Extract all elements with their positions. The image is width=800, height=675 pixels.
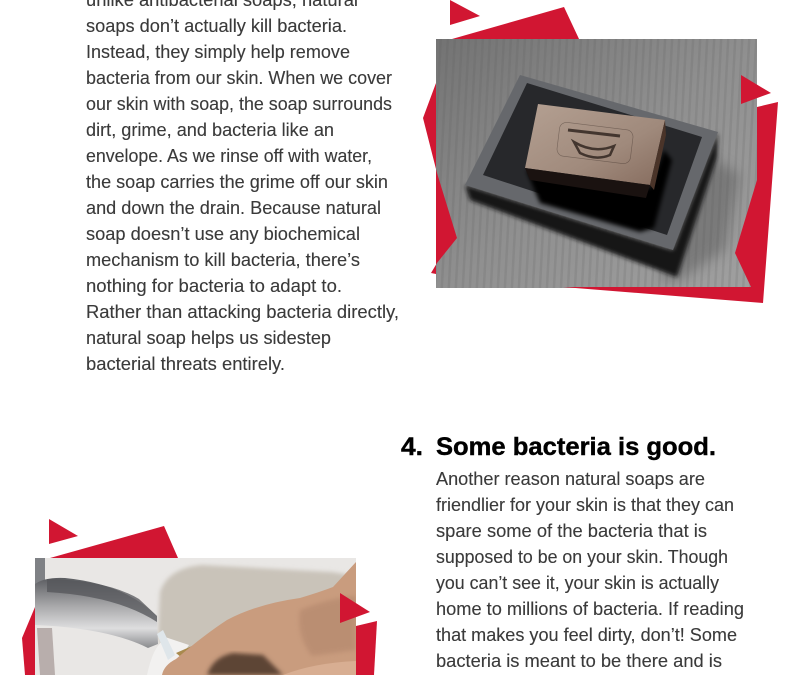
body text: natural soaps explanation: mechanism to kill bacteria, there’s	[86, 250, 360, 270]
body text: natural soaps explanation: soaps don’t actually kill bacteria.	[86, 16, 347, 36]
body text: skin bacteria explanation: home to millions of bacteria. If reading	[436, 599, 744, 619]
body text: skin bacteria explanation: spare some of the bacteria that is	[436, 521, 707, 541]
heading: Some bacteria is good: Some bacteria is good.	[436, 433, 716, 461]
body text: natural soaps explanation: the soap carries the grime off our skin	[86, 172, 388, 192]
red decorative frame: soap photo	[423, 0, 778, 303]
body text: natural soaps explanation: Rather than attacking bacteria directly,	[86, 302, 399, 322]
heading: Some bacteria is good: 4.	[401, 433, 423, 461]
red decorative frame: handwashing photo	[22, 519, 377, 675]
body text: natural soaps explanation: envelope. As we rinse off with water,	[86, 146, 372, 166]
photo: soap bar in dish	[436, 39, 757, 288]
body text: natural soaps explanation	[86, 0, 399, 374]
body text: natural soaps explanation: Instead, they simply help remove	[86, 42, 350, 62]
body text: skin bacteria explanation: that makes you feel dirty, don’t! Some	[436, 625, 737, 645]
body text: natural soaps explanation: nothing for bacteria to adapt to.	[86, 276, 342, 296]
body text: skin bacteria explanation: Another reason natural soaps are	[436, 469, 705, 489]
body text: skin bacteria explanation: friendlier for your skin is that they can	[436, 495, 734, 515]
body text: natural soaps explanation: dirt, grime, and bacteria like an	[86, 120, 334, 140]
body text: skin bacteria explanation: bacteria is meant to be there and is	[436, 651, 722, 671]
body text: natural soaps explanation: bacterial threats entirely.	[86, 354, 285, 374]
photo: hands under running faucet	[35, 558, 356, 675]
body text: skin bacteria explanation: you can’t see it, your skin is actually	[436, 573, 719, 593]
body text: natural soaps explanation: our skin with soap, the soap surrounds	[86, 94, 392, 114]
body text: skin bacteria explanation: supposed to be on your skin. Though	[436, 547, 728, 567]
body text: natural soaps explanation: natural soap helps us sidestep	[86, 328, 331, 348]
body text: natural soaps explanation: soap doesn’t use any biochemical	[86, 224, 360, 244]
body text: natural soaps explanation: bacteria from our skin. When we cover	[86, 68, 392, 88]
body text: natural soaps explanation: and down the drain. Because natural	[86, 198, 381, 218]
body text: skin bacteria explanation	[436, 469, 744, 671]
